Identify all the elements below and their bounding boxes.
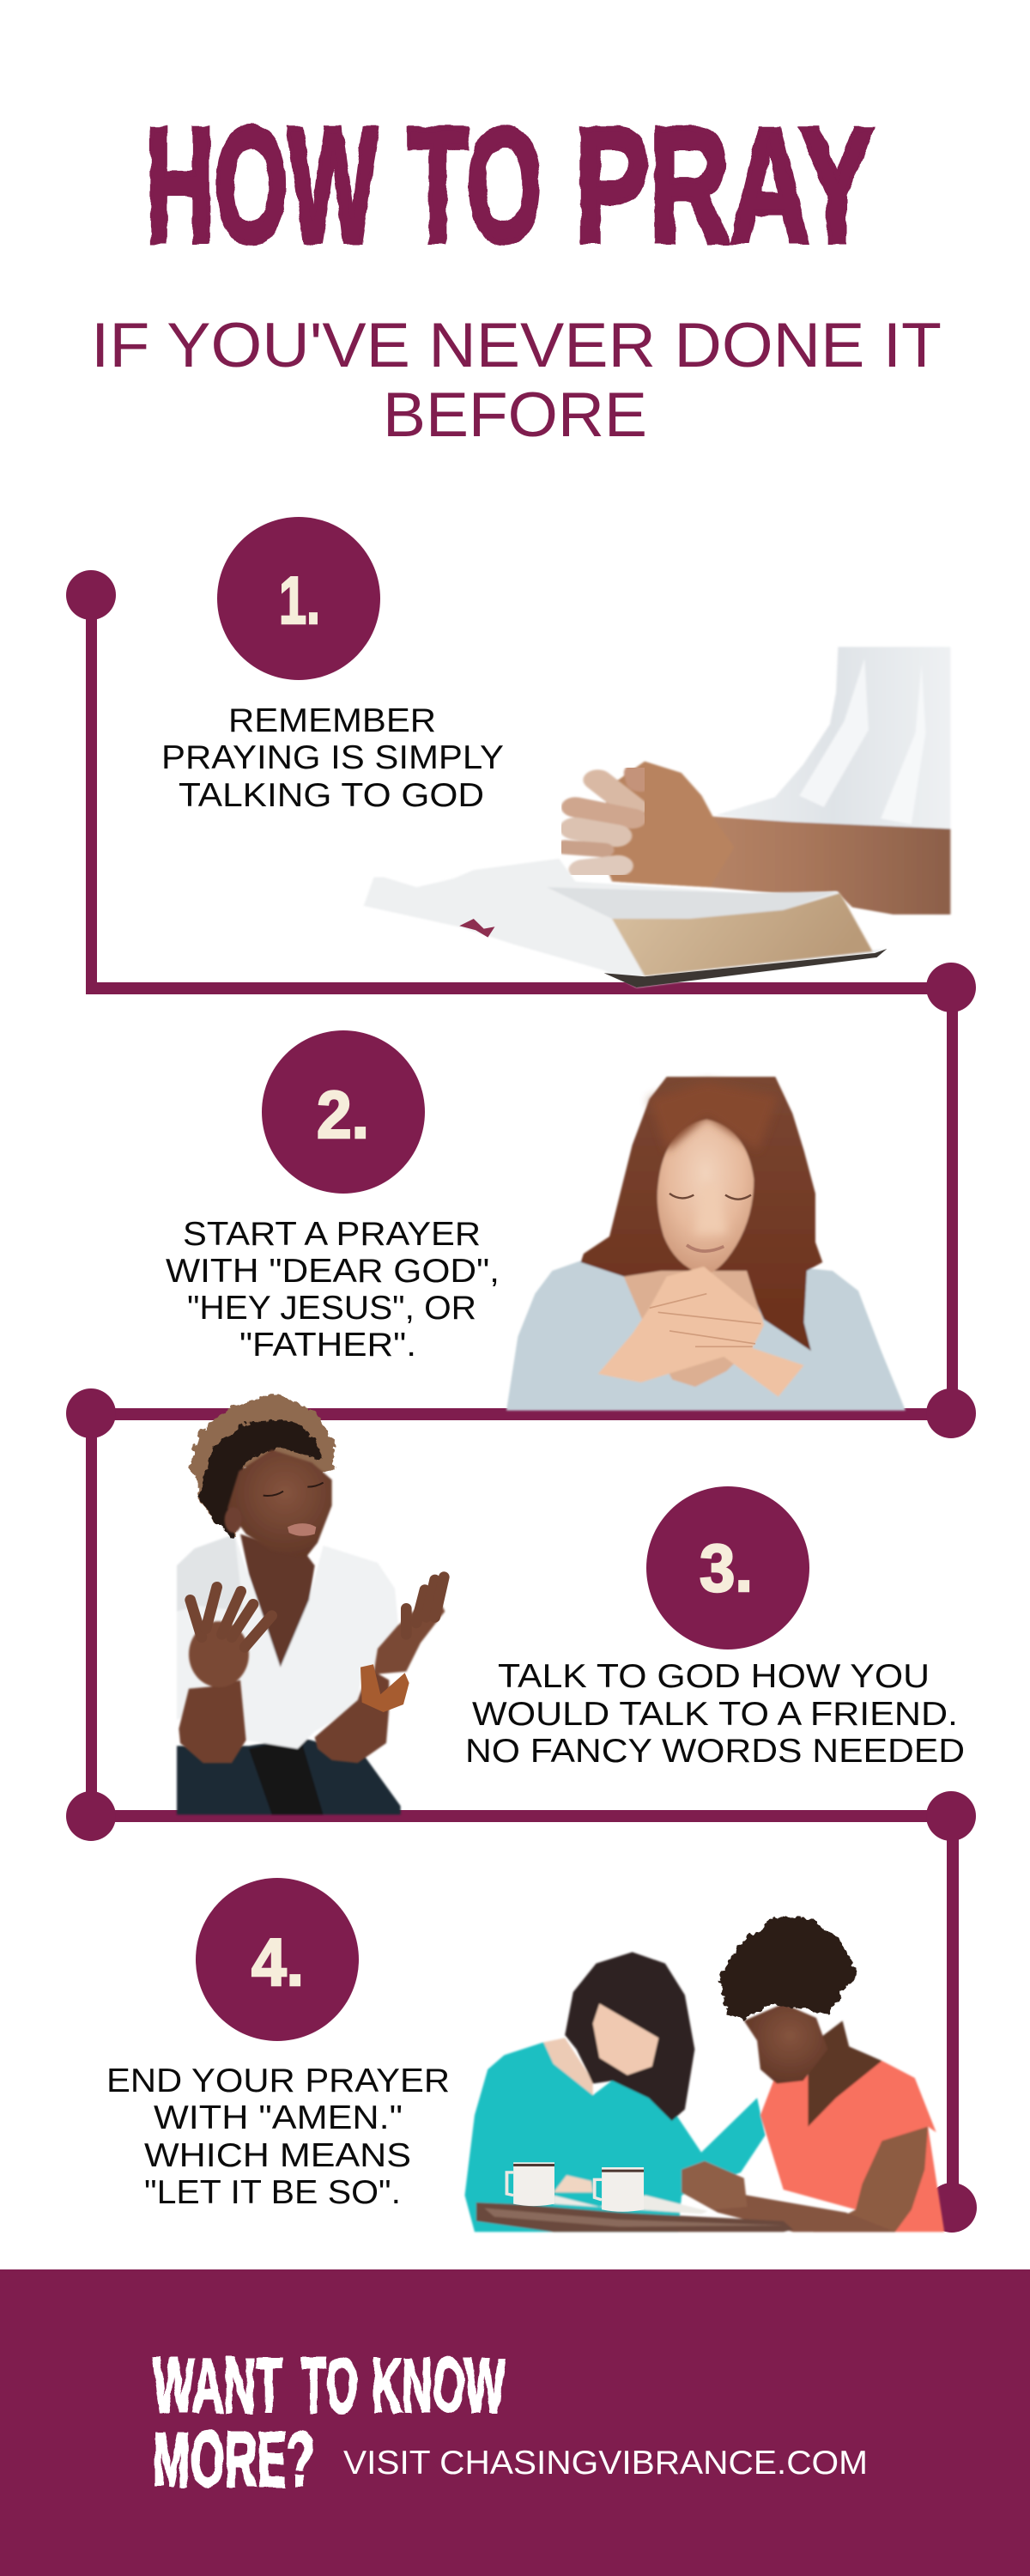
step 4 number badge: 4. bbox=[251, 1924, 304, 2000]
step 4 text: "LET IT BE SO". bbox=[144, 2174, 401, 2211]
step 1 text bbox=[161, 702, 504, 814]
footer heading: KNOW bbox=[372, 2343, 505, 2429]
footer link text: VISIT CHASINGVIBRANCE.COM bbox=[343, 2445, 868, 2482]
footer heading: TO bbox=[301, 2343, 358, 2429]
step 4 text: WHICH MEANS bbox=[144, 2137, 411, 2174]
footer heading: MORE? bbox=[153, 2417, 314, 2503]
step 3 text: NO FANCY WORDS NEEDED bbox=[465, 1733, 965, 1770]
step 2 text: "HEY JESUS", OR bbox=[187, 1290, 476, 1327]
step 4 text: END YOUR PRAYER bbox=[106, 2063, 450, 2099]
subtitle: BEFORE bbox=[383, 380, 647, 450]
step 4 text bbox=[106, 2063, 450, 2211]
photo: woman with raised palms bbox=[177, 1393, 445, 1814]
step 1 text: REMEMBER bbox=[228, 702, 436, 739]
step 4 number badge bbox=[196, 1878, 359, 2041]
step 3 text bbox=[465, 1658, 965, 1770]
step 2 text bbox=[166, 1216, 500, 1364]
footer heading: WANT bbox=[153, 2343, 282, 2429]
step 1 text: PRAYING IS SIMPLY bbox=[161, 739, 504, 776]
title: TO bbox=[408, 94, 542, 276]
step 2 text: WITH "DEAR GOD", bbox=[166, 1253, 500, 1290]
photo: red-haired woman praying bbox=[506, 1077, 906, 1411]
step 2 text: "FATHER". bbox=[239, 1327, 416, 1364]
footer heading bbox=[153, 2343, 505, 2503]
footer band bbox=[0, 2269, 1030, 2576]
step 2 text: START A PRAYER bbox=[183, 1216, 481, 1253]
step 1 number badge bbox=[217, 517, 380, 680]
step 3 text: TALK TO GOD HOW YOU bbox=[498, 1658, 930, 1695]
step 2 number badge: 2. bbox=[317, 1077, 369, 1152]
connector frame lines and dots bbox=[66, 570, 977, 2233]
step 1 number badge: 1. bbox=[279, 562, 320, 638]
step 3 text: WOULD TALK TO A FRIEND. bbox=[472, 1696, 958, 1733]
photo: two women praying at a table bbox=[464, 1917, 944, 2232]
title: PRAY bbox=[575, 94, 874, 276]
step 4 text: WITH "AMEN." bbox=[154, 2099, 403, 2136]
step 1 text: TALKING TO GOD bbox=[179, 777, 484, 814]
icon: wooden bangle bbox=[360, 1664, 409, 1712]
title bbox=[146, 94, 874, 276]
title: HOW bbox=[146, 94, 378, 276]
step 2 number badge bbox=[262, 1030, 425, 1194]
step 3 number badge bbox=[646, 1486, 809, 1649]
icon: curly hair bbox=[719, 1917, 857, 2020]
photo: hands folded on bible bbox=[364, 647, 950, 987]
subtitle: IF YOU'VE NEVER DONE IT bbox=[91, 311, 942, 380]
step 3 number badge: 3. bbox=[700, 1530, 753, 1606]
subtitle bbox=[91, 311, 942, 450]
